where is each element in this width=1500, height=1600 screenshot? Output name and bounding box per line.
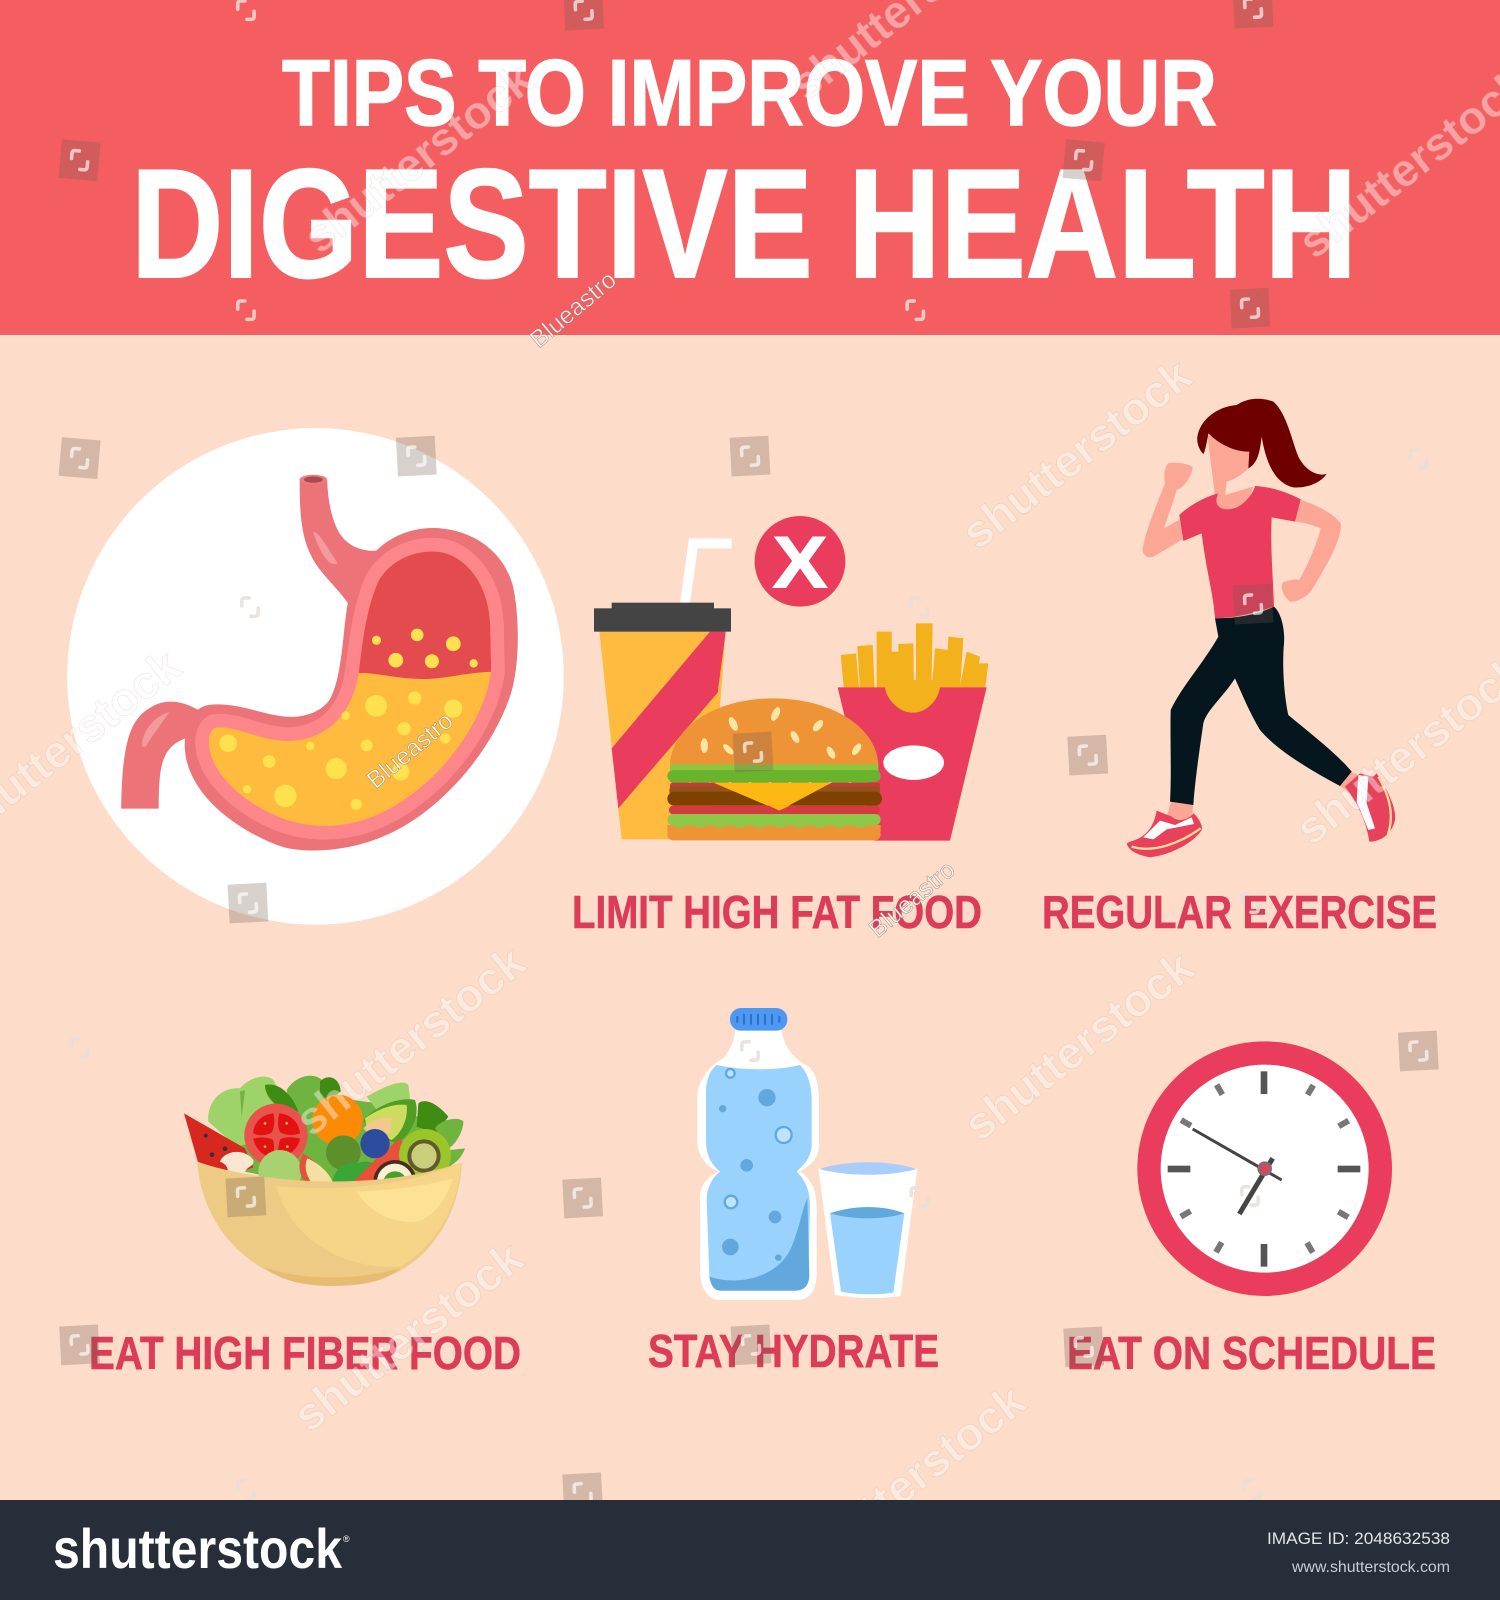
header banner	[0, 0, 1500, 335]
stock watermark overlay: shutterstock	[952, 348, 1201, 559]
image id: IMAGE ID: 2048632538	[1267, 1529, 1450, 1548]
stock watermark overlay: shutterstock	[285, 935, 535, 1146]
icon: salad bowl	[184, 1076, 465, 1286]
registered mark: ®	[343, 1534, 350, 1544]
white circle backdrop	[67, 428, 564, 925]
panel: stomach illustration	[67, 428, 564, 925]
stock watermark overlay: shutterstock	[294, 52, 543, 263]
stock watermark overlay: shutterstock	[283, 1231, 533, 1442]
drink cup	[594, 603, 731, 839]
leggings	[1170, 607, 1352, 805]
front shoe	[1127, 811, 1202, 857]
bottle	[697, 1008, 819, 1300]
watermelon slice	[184, 1113, 253, 1177]
blueberry	[360, 1129, 390, 1158]
cucumber	[258, 1150, 302, 1193]
website: www.shutterstock.com	[1291, 1559, 1450, 1576]
radish	[373, 1160, 417, 1203]
stock watermark overlay: shutterstock	[785, 1374, 1035, 1584]
no symbol	[755, 516, 845, 607]
icon: woman running	[1127, 399, 1395, 857]
footer logo: shutterstock	[53, 1517, 343, 1580]
mushroom	[220, 1152, 253, 1178]
french fries	[838, 623, 988, 841]
stock watermark overlay: Blueastro	[362, 707, 459, 794]
icon: water bottle and glass	[697, 1008, 917, 1300]
label: eat high fiber food: EAT HIGH FIBER FOOD	[89, 1327, 521, 1379]
icon: wall clock	[1137, 1041, 1392, 1296]
clock hands	[1193, 1129, 1282, 1214]
footer bar	[0, 1500, 1500, 1600]
orange slice	[312, 1095, 363, 1145]
stock watermark overlay: Blueastro	[864, 856, 961, 943]
label: stay hydrate: STAY HYDRATE	[648, 1325, 939, 1377]
icon: stomach	[121, 475, 518, 851]
t-shirt	[1179, 486, 1301, 618]
broccoli	[326, 1135, 361, 1170]
kiwi	[399, 1129, 451, 1181]
burger	[667, 698, 882, 840]
skin	[1143, 435, 1367, 822]
ponytail hair	[1197, 399, 1327, 487]
icon: fast food	[594, 516, 988, 841]
no symbol: X	[772, 520, 828, 603]
back shoe	[1345, 773, 1395, 842]
bowl	[197, 1162, 462, 1286]
label: limit high fat food: LIMIT HIGH FAT FOOD	[572, 886, 982, 938]
strawberry	[353, 1138, 407, 1187]
glass	[818, 1162, 917, 1298]
stock watermark overlay: shutterstock	[954, 940, 1203, 1151]
stock watermark overlay: Blueastro	[525, 266, 622, 354]
avocado	[363, 1099, 417, 1143]
greens	[208, 1076, 465, 1190]
tomato	[244, 1104, 308, 1167]
label: eat on schedule: EAT ON SCHEDULE	[1067, 1327, 1436, 1379]
title line 1: TIPS TO IMPROVE YOUR	[282, 40, 1217, 145]
straw	[685, 543, 732, 603]
